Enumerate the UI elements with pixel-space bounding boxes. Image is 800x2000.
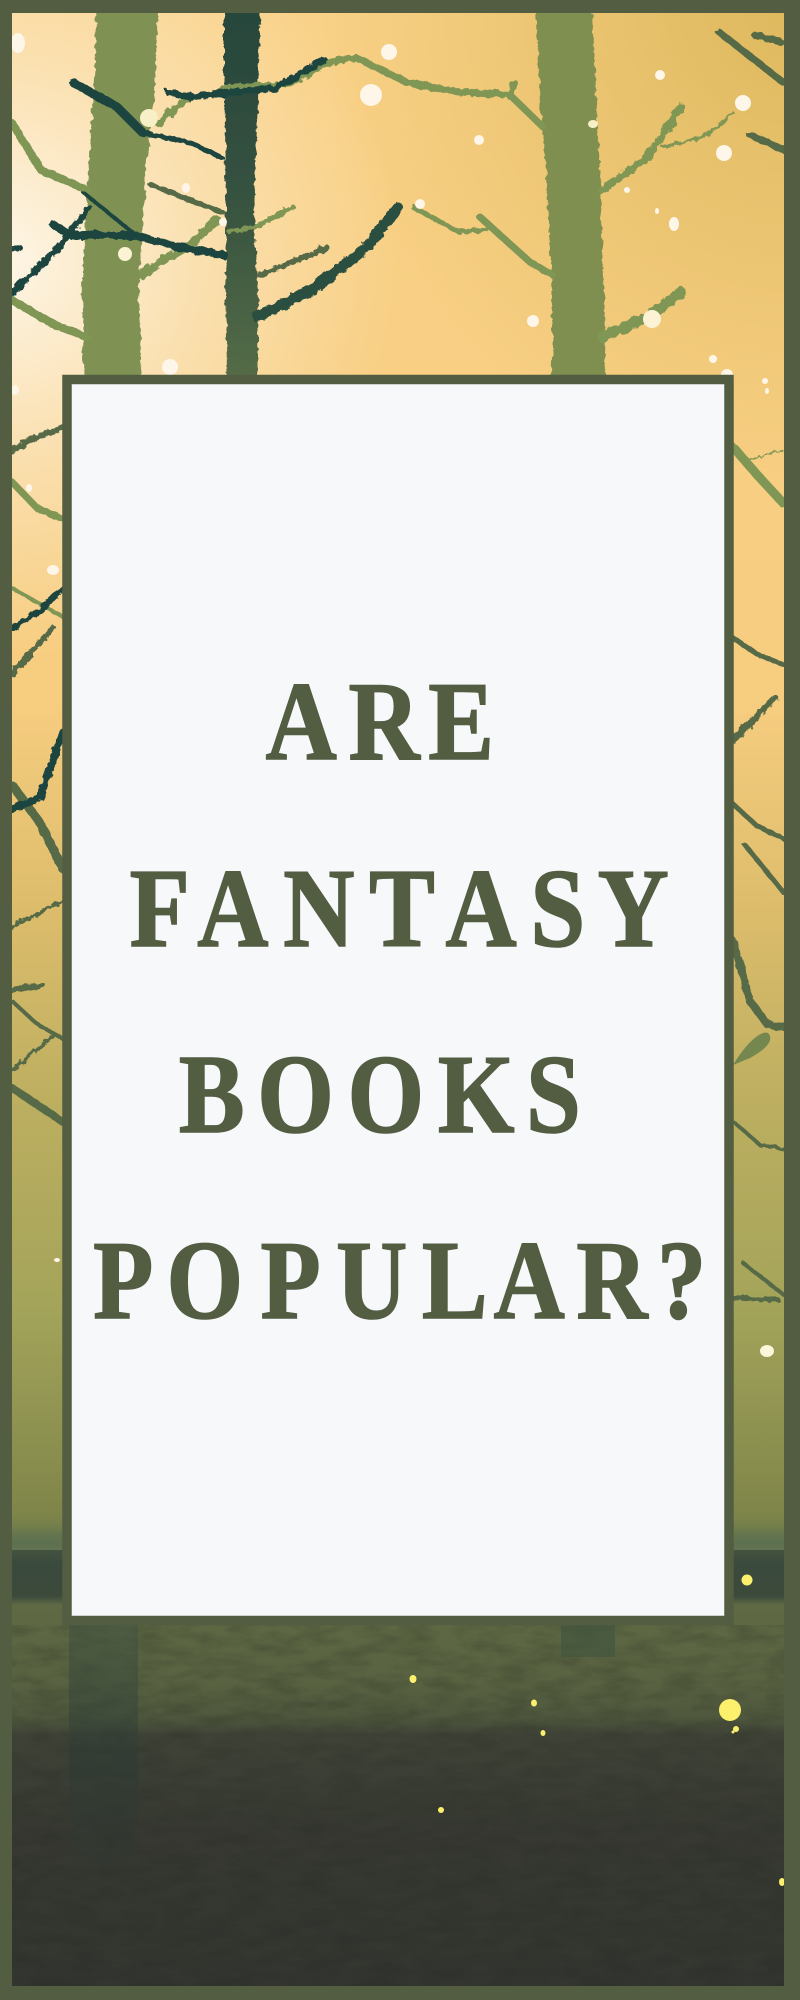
tree trunks <box>82 10 605 378</box>
title line: POPULAR?: POPULAR? <box>93 1218 706 1342</box>
title panel <box>67 380 729 1620</box>
snowflakes <box>11 33 774 1357</box>
mid green branches <box>12 32 784 1300</box>
leaf shape on right branch <box>733 1033 770 1065</box>
title line: FANTASY: FANTASY <box>130 846 669 970</box>
title <box>93 659 706 1342</box>
title line: ARE: ARE <box>266 659 494 783</box>
light green branches <box>12 57 784 617</box>
title line: BOOKS: BOOKS <box>179 1032 581 1156</box>
sky gradient <box>12 13 784 1563</box>
forest floor <box>12 1525 784 1990</box>
fireflies <box>410 1574 785 1886</box>
dark branches <box>12 60 398 809</box>
